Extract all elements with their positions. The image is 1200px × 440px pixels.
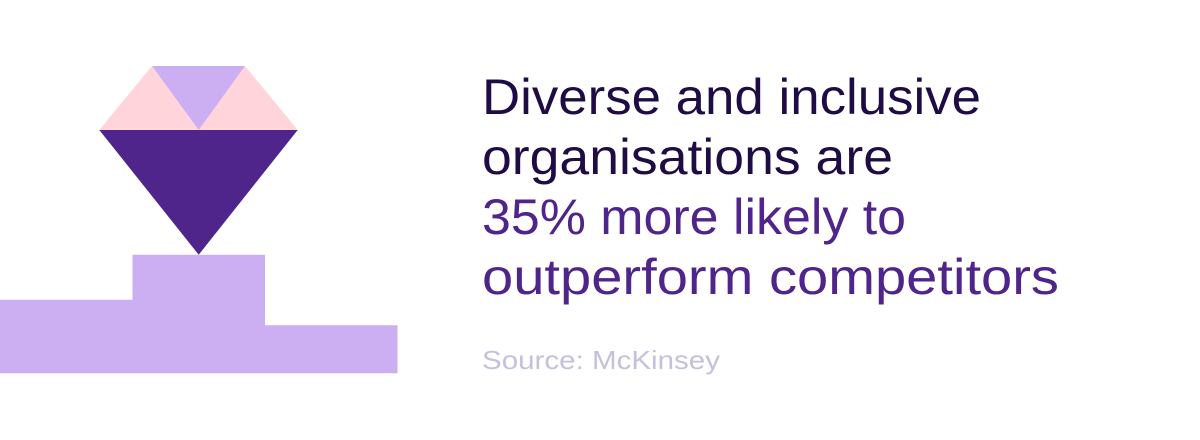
podium: [0, 255, 398, 373]
heading: [482, 69, 1059, 305]
icon: diamond on podium: [0, 66, 398, 373]
diamond top facet: [152, 66, 245, 130]
source note: Source: McKinsey: [482, 345, 720, 375]
diamond right facet: [199, 66, 298, 130]
heading line 2: organisations are: [482, 129, 893, 185]
diamond lower facet: [99, 130, 298, 255]
heading line 1: Diverse and inclusive: [482, 69, 981, 125]
highlighted line 3: 35% more likely to: [482, 189, 906, 245]
highlighted line 4: outperform competitors: [482, 249, 1059, 305]
diamond left facet: [99, 66, 199, 130]
